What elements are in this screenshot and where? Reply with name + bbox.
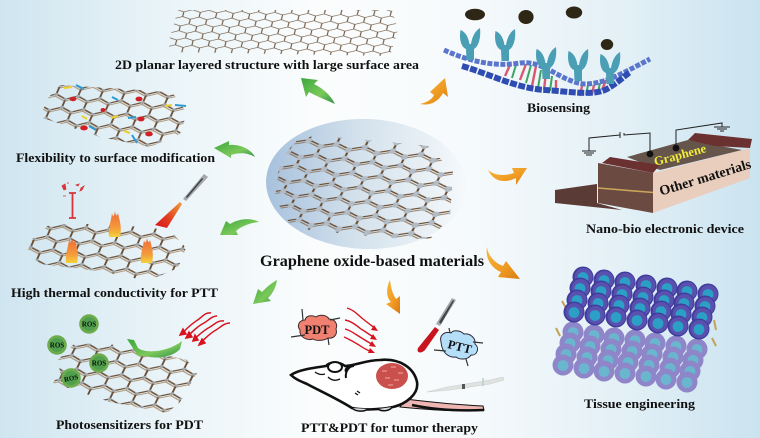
- icon: ROS circles: ROS: [63, 373, 79, 384]
- graphene links: [556, 301, 716, 346]
- icon: laser pen: [418, 298, 456, 352]
- central graphene sheet: [275, 135, 453, 239]
- antigen particles: [465, 6, 613, 50]
- arrow: green to flexibility: [214, 141, 255, 158]
- label: 2D planar: 2D planar layered structure with large surface area: [115, 58, 420, 72]
- wires and battery: [582, 123, 730, 155]
- backdrop ellipse: [264, 116, 468, 252]
- gold strip: [598, 188, 660, 193]
- mouse ear: [328, 362, 342, 372]
- PTT cloud: PTT: [446, 337, 474, 357]
- top caps: [602, 157, 660, 173]
- thin graphene mesh: [168, 10, 398, 56]
- label: photosensitizers: Photosensitizers for PDT: [56, 418, 204, 432]
- icon: syringe: [427, 377, 504, 392]
- label: tissue: Tissue engineering: [584, 397, 696, 411]
- label: biosensing: Biosensing: [527, 101, 591, 115]
- right face: [653, 148, 750, 213]
- arrow: orange to tumor therapy: [386, 280, 400, 314]
- panel: flexibility to surface modification: [16, 85, 215, 165]
- label: thermal: High thermal conductivity for PTT: [11, 286, 219, 300]
- arrow: green to 2D planar: [301, 78, 335, 104]
- front face: [598, 163, 653, 213]
- contacts: [647, 151, 653, 157]
- panel: nano-bio electronic device: [555, 123, 754, 236]
- red waves, PDT: [344, 308, 378, 353]
- panel: PTT and PDT for tumor therapy: [291, 298, 504, 435]
- red light waves: [180, 313, 230, 345]
- arrow: orange to biosensing: [420, 78, 448, 105]
- DNA backbone: [444, 50, 650, 96]
- arrow: orange to tissue: [487, 247, 520, 279]
- upper cell layer: [564, 266, 718, 340]
- PDT graphene sheet: [53, 343, 197, 413]
- label: Graphene: Graphene: [652, 141, 708, 169]
- arrow: green to PDT: [253, 280, 277, 304]
- icon: laser pen: [155, 174, 208, 228]
- thermal graphene sheet: [27, 224, 186, 281]
- panel: photosensitizers for PDT: [47, 313, 230, 432]
- PDT cloud: PDT: [304, 323, 330, 337]
- left lower block: [555, 184, 622, 210]
- label: Other materials: Other materials: [658, 157, 754, 199]
- heading: Graphene oxide-based materials: Graphene oxide-based materials: [260, 253, 484, 270]
- icon: thermometer: [62, 182, 84, 218]
- mouse feet: [352, 407, 392, 411]
- panel: 2D planar structure: [115, 10, 420, 72]
- panel: high thermal conductivity: [11, 174, 219, 300]
- label: tumor therapy: PTT&PDT for tumor therapy: [301, 421, 479, 435]
- panel: tissue engineering: [552, 266, 718, 411]
- panel: biosensing: [444, 6, 650, 115]
- PDT cloud: [291, 309, 340, 345]
- arrow: orange to device: [488, 168, 527, 185]
- antibodies: [460, 28, 620, 84]
- mouse tail: [400, 399, 484, 411]
- icon: flames: [66, 211, 153, 263]
- arrow: green curved inside PDT sheet: [127, 339, 182, 358]
- icon: ROS circles: ROS: [82, 320, 96, 328]
- icon: ROS circles: ROS: [50, 342, 64, 350]
- mouse eye and whiskers: [315, 372, 360, 395]
- label: device: Nano-bio electronic device: [586, 222, 744, 236]
- functional group marks: [64, 85, 186, 143]
- mouse body: [291, 360, 417, 409]
- top face: [627, 140, 742, 170]
- panel: central graphene oxide illustration: [264, 116, 468, 252]
- tumor: [376, 363, 408, 389]
- arrow: green to thermal: [220, 219, 259, 235]
- modified graphene sheet: [40, 85, 187, 147]
- lower cell layer: [552, 322, 708, 392]
- label: flexibility: Flexibility to surface modification: [16, 151, 215, 165]
- icon: ROS circles: [47, 314, 109, 388]
- PTT cloud: [434, 328, 483, 366]
- icon: ROS circles: ROS: [92, 360, 106, 368]
